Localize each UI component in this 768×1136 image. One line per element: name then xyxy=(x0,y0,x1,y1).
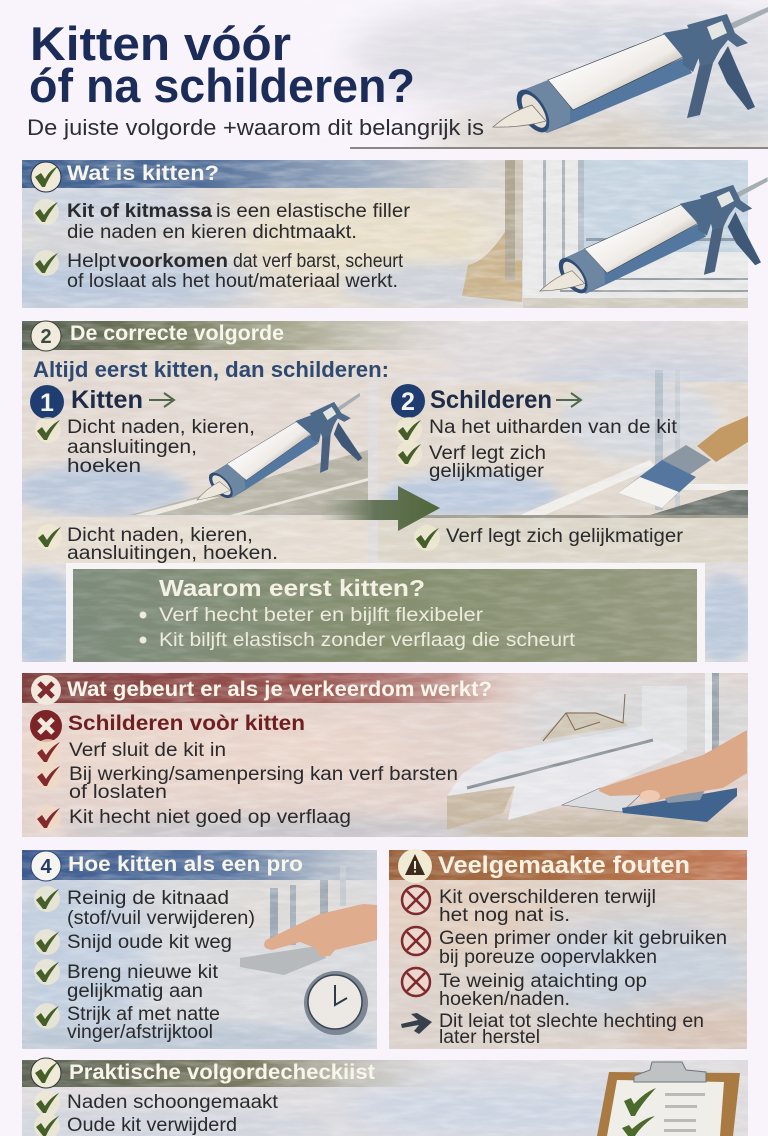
icon: step number 2: 2 xyxy=(401,388,415,416)
text: Snijd oude kit weg xyxy=(67,932,232,953)
step text xyxy=(67,417,255,477)
text: prevention xyxy=(67,251,404,292)
icon: check xyxy=(34,959,60,985)
text xyxy=(439,887,656,926)
text: Kit overschilderen terwijl xyxy=(439,887,656,908)
icon: check xyxy=(36,524,62,550)
callout heading: Waarom eerst kitten? xyxy=(159,575,425,601)
icon: check xyxy=(34,1090,60,1116)
text: Bij werking/samenpersing kan verf barsten xyxy=(69,764,458,785)
left step background xyxy=(22,382,368,515)
step text: aansluitingen, xyxy=(67,437,197,458)
illustration: clipboard xyxy=(597,1062,740,1136)
title xyxy=(29,17,415,112)
step heading: Kitten xyxy=(71,386,143,414)
panel background xyxy=(0,1060,748,1136)
text: Breng nieuwe kit xyxy=(67,962,219,983)
text: prevention: Helpt xyxy=(67,251,117,272)
icon: check xyxy=(396,441,422,467)
icon: check xyxy=(34,929,60,955)
illustration: caulking gun xyxy=(184,393,374,507)
text: later herstel xyxy=(439,1027,540,1048)
text xyxy=(429,443,546,482)
icon: x circle xyxy=(402,927,430,955)
icon: number badge: 4 xyxy=(40,856,52,878)
callout: waarom eerst kitten xyxy=(73,569,697,662)
text: prevention: voorkomen xyxy=(118,251,228,272)
text: Naden schoongemaakt xyxy=(67,1092,279,1113)
callout list: Kit biljft elastisch zonder verflaag die scheurt xyxy=(159,630,576,651)
panel: de correcte volgorde xyxy=(0,321,768,670)
arrow xyxy=(556,393,581,407)
icon: red check xyxy=(35,805,61,831)
panel background xyxy=(0,321,768,670)
callout list xyxy=(140,605,576,651)
panel background xyxy=(0,850,380,1056)
step 2: schilderen xyxy=(391,384,748,551)
panel: praktische volgordecheckiist xyxy=(0,1058,748,1136)
step 1: kitten xyxy=(30,385,374,564)
step text: Dicht naden, kieren, xyxy=(67,417,255,438)
heading: De correcte volgorde xyxy=(70,322,284,345)
callout background xyxy=(73,569,697,662)
icon: number badge xyxy=(31,321,61,351)
text: definition xyxy=(67,201,411,243)
text: definition: is een elastische filler xyxy=(216,201,411,222)
text: hoeken/naden. xyxy=(439,989,570,1010)
panel: wat gebeurt er als je verkeerdom werkt xyxy=(22,673,748,837)
icon: header check badge xyxy=(31,162,61,192)
step heading: Schilderen xyxy=(430,386,552,414)
panel: hoe kitten als een pro xyxy=(0,850,380,1056)
text: Dit leiat tot slechte hechting en xyxy=(439,1011,704,1032)
illustration: hand with scraper xyxy=(562,730,747,822)
text: gelijkmatiger xyxy=(429,461,545,482)
subheading: Altijd eerst kitten, dan schilderen: xyxy=(33,357,389,382)
text: (stof/vuil verwijderen) xyxy=(67,908,255,929)
panel: header xyxy=(0,0,768,155)
text xyxy=(67,888,255,929)
step note xyxy=(67,525,278,564)
icon: check xyxy=(34,1003,60,1029)
heading: Wat gebeurt er als je verkeerdom werkt? xyxy=(67,678,492,701)
arrow xyxy=(149,393,174,407)
subheading: Schilderen voòr kitten xyxy=(68,712,305,735)
title: Kitten vóór xyxy=(30,17,291,70)
header texture xyxy=(348,0,768,149)
text xyxy=(439,1011,704,1048)
step note: Dicht naden, kieren, xyxy=(67,525,253,546)
panel background and illustration xyxy=(22,673,748,837)
heading: Veelgemaakte fouten xyxy=(438,852,690,879)
icon: arrow xyxy=(401,1013,432,1034)
text: prevention: of loslaat als het hout/materiaal werkt. xyxy=(67,271,398,292)
icon: number badge xyxy=(31,851,61,881)
panel background with window xyxy=(0,160,748,315)
text: gelijkmatig aan xyxy=(67,981,203,1002)
text: definition: Kit of kitmassa xyxy=(67,201,212,222)
illustration: paint brush xyxy=(618,416,748,508)
text: Reinig de kitnaad xyxy=(67,888,229,909)
icon: check xyxy=(396,417,422,443)
text: Na het uitharden van de kit xyxy=(429,417,678,438)
text: prevention: dat verf barst, scheurt xyxy=(233,251,404,272)
text: Geen primer onder kit gebruiken xyxy=(439,928,727,949)
icon: check xyxy=(35,417,61,443)
icon: red check xyxy=(35,763,61,789)
icon: header x badge xyxy=(31,675,61,705)
arrow: step 1 to step 2 xyxy=(320,486,440,531)
icon: step number 2 xyxy=(391,384,425,418)
illustration: caulking gun header xyxy=(493,7,768,138)
text: Verf sluit de kit in xyxy=(69,740,226,761)
icon: check xyxy=(33,250,59,276)
illustration: caulking gun window xyxy=(535,177,768,300)
text: Verf legt zich gelijkmatiger xyxy=(446,526,684,547)
icon: check xyxy=(34,1113,60,1136)
heading: Praktische volgordecheckiist xyxy=(69,1061,375,1084)
text: Oude kit verwijderd xyxy=(67,1115,237,1136)
text: Kit hecht niet goed op verflaag xyxy=(69,807,351,828)
icon: check xyxy=(414,525,440,551)
icon: check xyxy=(33,199,59,225)
icon: step number 1 xyxy=(30,385,64,419)
text: of loslaten xyxy=(69,782,167,803)
panel: veelgemaakte fouten xyxy=(389,849,747,1049)
subtitle: De juiste volgorde +waarom dit belangrijk is xyxy=(27,115,484,140)
text xyxy=(69,764,458,803)
panel: wat is kitten xyxy=(0,160,748,315)
text xyxy=(67,962,219,1002)
icon: x circle xyxy=(402,886,430,914)
text: definition: die naden en kieren dichtmaakt. xyxy=(67,222,357,243)
text xyxy=(67,1004,220,1043)
illustration: clock xyxy=(304,971,368,1035)
step text: hoeken xyxy=(67,456,141,477)
icon: number badge: 2 xyxy=(40,326,52,348)
icon: step number 1: 1 xyxy=(40,389,54,417)
icon: x circle xyxy=(402,968,430,996)
illustration: hand with block xyxy=(240,904,377,975)
text: Verf legt zich xyxy=(429,443,546,464)
icon: x badge xyxy=(30,710,62,742)
text: vinger/afstrijktool xyxy=(67,1022,213,1043)
heading: Wat is kitten? xyxy=(67,162,219,185)
heading: Hoe kitten als een pro xyxy=(68,853,303,876)
title: óf na schilderen? xyxy=(29,59,415,112)
callout list: Verf hecht beter en bijlft flexibeler xyxy=(159,605,484,626)
text xyxy=(439,928,727,968)
icon: check xyxy=(34,886,60,912)
white frame of reason box xyxy=(66,563,705,662)
icon: header check badge xyxy=(31,1058,61,1088)
text: Te weinig ataichting op xyxy=(439,971,647,992)
icon: warning xyxy=(398,849,432,883)
icon: red check xyxy=(35,739,61,765)
right step background xyxy=(378,382,748,515)
text: het nog nat is. xyxy=(439,905,570,926)
step note: aansluitingen, hoeken. xyxy=(67,543,278,564)
text: bij poreuze oopervlakken xyxy=(439,947,657,968)
text: Strijk af met natte xyxy=(67,1004,220,1025)
text xyxy=(439,971,647,1010)
panel background xyxy=(389,850,747,1049)
